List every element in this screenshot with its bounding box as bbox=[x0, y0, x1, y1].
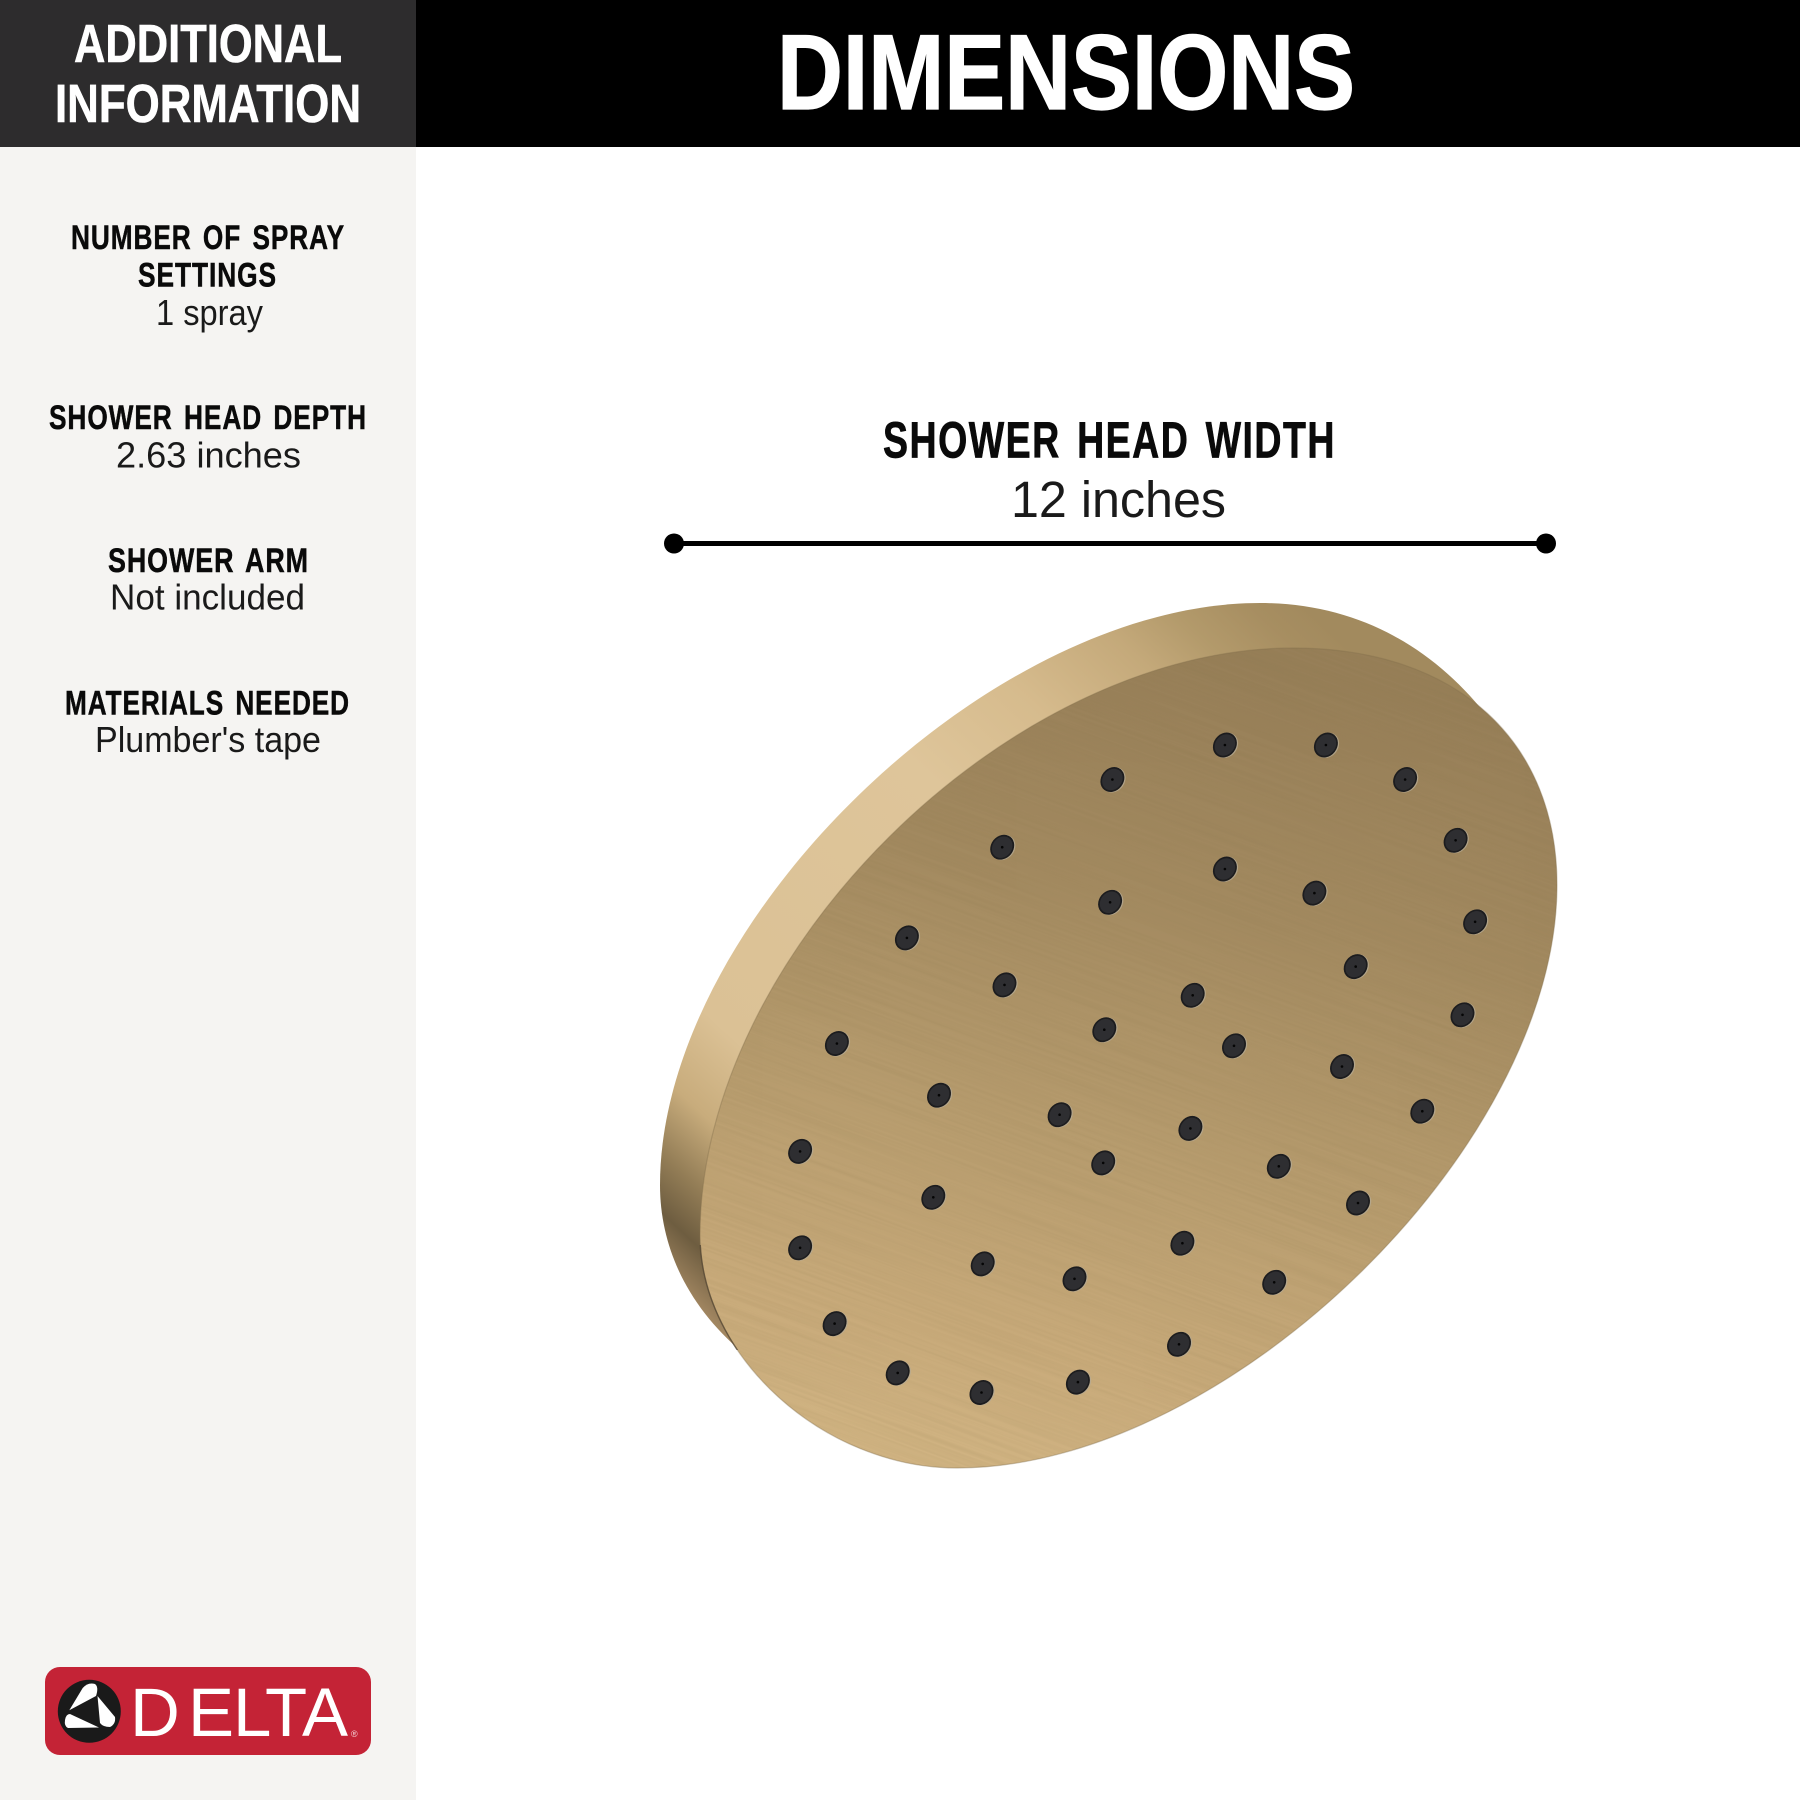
header: additional information bbox=[0, 0, 416, 147]
info: number of spray settings: SETTINGS bbox=[138, 256, 277, 294]
heading: shower head width: SHOWER HEAD WIDTH bbox=[883, 412, 1336, 468]
nozzles bbox=[783, 728, 1493, 1410]
heading: shower head width bbox=[883, 412, 1336, 528]
header: dimensions: DIMENSIONS bbox=[777, 12, 1355, 132]
info: materials needed: MATERIALS NEEDED bbox=[65, 684, 350, 722]
shower head bbox=[660, 603, 1558, 1469]
info: shower arm bbox=[108, 542, 309, 618]
face bbox=[700, 648, 1557, 1468]
rim bbox=[660, 603, 1490, 1352]
header: additional information: ADDITIONAL bbox=[74, 14, 342, 74]
info: shower head depth: SHOWER HEAD DEPTH bbox=[49, 399, 367, 437]
info: shower head depth: 2.63 inches bbox=[116, 434, 301, 476]
header: additional information: INFORMATION bbox=[55, 74, 361, 134]
face lower shadow edge bbox=[700, 1245, 738, 1350]
info: shower arm: Not included bbox=[110, 576, 305, 618]
info: shower arm: SHOWER ARM bbox=[108, 542, 309, 580]
logo: delta: ® bbox=[351, 1729, 358, 1739]
brushed texture bbox=[442, 362, 1758, 1738]
header: dimensions bbox=[416, 0, 1800, 147]
logo: delta bbox=[45, 1667, 371, 1755]
info: materials needed bbox=[65, 684, 350, 760]
logo: delta: DELTA bbox=[130, 1674, 348, 1751]
info: number of spray settings: 1 spray bbox=[156, 292, 263, 333]
panel: sidebar bbox=[0, 147, 416, 1800]
info: number of spray settings: NUMBER OF SPRAY bbox=[71, 219, 345, 257]
info: number of spray settings bbox=[71, 219, 345, 333]
info: shower head depth bbox=[49, 399, 367, 476]
info: materials needed: Plumber's tape bbox=[95, 719, 321, 760]
dimension line bbox=[664, 534, 1556, 554]
heading: shower head width: 12 inches bbox=[1011, 471, 1226, 528]
